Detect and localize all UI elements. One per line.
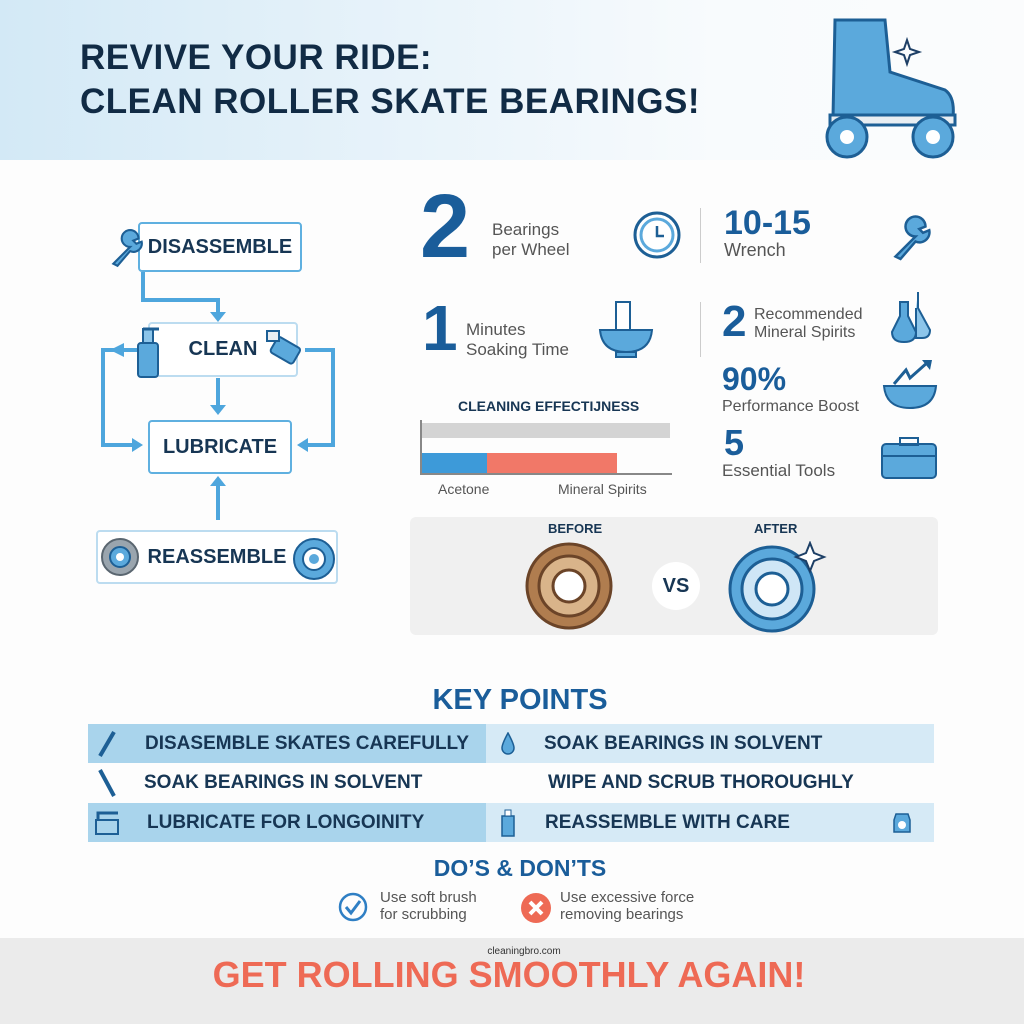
title: CLEAN ROLLER SKATE BEARINGS! <box>80 82 700 121</box>
vs badge <box>652 562 700 610</box>
dont item: removing bearings <box>560 906 683 923</box>
chart: cleaning effectiveness: CLEANING EFFECTIJNESS <box>458 398 639 414</box>
key points table: WIPE AND SCRUB THOROUGHLY <box>548 772 854 793</box>
icon: spray bottle <box>137 328 159 378</box>
step: disassemble <box>138 222 302 272</box>
header band <box>0 0 1024 160</box>
icon: wrench <box>894 215 931 260</box>
icon: flasks <box>891 292 931 343</box>
icon: bearing blue <box>293 538 335 580</box>
icon: bearing grey <box>101 538 139 576</box>
key points table: DISASEMBLE SKATES CAREFULLY <box>145 733 469 754</box>
key points table: SOAK BEARINGS IN SOLVENT <box>544 733 822 754</box>
panel: before vs after <box>410 517 938 635</box>
chart: cleaning effectiveness: Acetone <box>438 481 489 497</box>
footer band: cleaningbro.com <box>487 946 561 957</box>
key points table <box>88 724 934 842</box>
stat: 2 recommended <box>722 297 862 346</box>
stat: 2 bearings: per Wheel <box>492 240 569 259</box>
stat: 90%: Performance Boost <box>722 398 859 415</box>
stat: 2 recommended: Mineral Spirits <box>754 324 855 341</box>
step: reassemble <box>96 530 338 584</box>
icon: clock <box>634 212 680 258</box>
heading: dos and donts: DO’S & DON’TS <box>434 855 606 881</box>
stat: 10-15 wrench <box>724 204 811 260</box>
divider <box>700 208 701 263</box>
icon: roller skate <box>826 18 956 158</box>
stat: 2 bearings <box>420 177 569 277</box>
key points table: REASSEMBLE WITH CARE <box>545 812 790 833</box>
chart: cleaning effectiveness <box>420 398 672 497</box>
panel: before vs after: AFTER <box>754 521 797 536</box>
do item: for scrubbing <box>380 906 467 923</box>
flowchart <box>96 222 338 584</box>
panel: before vs after: BEFORE <box>548 521 602 536</box>
title: REVIVE YOUR RIDE: <box>80 38 432 77</box>
icon: wrench <box>112 229 143 268</box>
do item <box>338 889 477 923</box>
icon: bowl chart <box>882 360 938 409</box>
vs badge: VS <box>663 574 689 596</box>
chart: cleaning effectiveness: Mineral Spirits <box>558 481 647 497</box>
stat: 10-15 wrench: 10-15 <box>724 204 811 242</box>
dont item: Use excessive force <box>560 889 694 906</box>
step: reassemble: REASSEMBLE <box>148 546 286 568</box>
icon: clean bearing <box>728 541 826 632</box>
footer band <box>0 938 1024 1024</box>
footer slogan: GET ROLLING SMOOTHLY AGAIN! <box>213 954 805 995</box>
icon: brush <box>266 330 301 365</box>
flow: arrows <box>101 272 335 520</box>
key points table: SOAK BEARINGS IN SOLVENT <box>144 772 422 793</box>
step: clean: CLEAN <box>189 338 257 360</box>
title <box>80 38 700 121</box>
do item: Use soft brush <box>380 889 477 906</box>
icon: toolbox <box>881 437 937 479</box>
step: clean <box>148 322 298 377</box>
icon: dirty bearing <box>526 542 612 630</box>
stat: 1 minutes: Minutes <box>466 320 526 339</box>
stat: 2 bearings: Bearings <box>492 220 559 239</box>
step: disassemble: DISASSEMBLE <box>148 236 292 258</box>
icon: bowl <box>598 301 654 358</box>
stat: 1 minutes <box>422 292 569 364</box>
stat: 10-15 wrench: Wrench <box>724 240 786 260</box>
stat: 5 tools: 5 <box>724 422 744 463</box>
stat: 1 minutes: Soaking Time <box>466 340 569 359</box>
dont item <box>521 889 694 923</box>
step: lubricate: LUBRICATE <box>163 436 277 458</box>
stat: 5 tools: Essential Tools <box>722 461 835 480</box>
stat: 1 minutes: 1 <box>422 292 458 364</box>
stat: 2 bearings: 2 <box>420 177 470 277</box>
key points table: LUBRICATE FOR LONGOINITY <box>147 812 424 833</box>
stat: 5 tools <box>722 422 835 480</box>
step: lubricate <box>148 420 292 474</box>
heading: key points: KEY POINTS <box>432 684 608 716</box>
stat: 2 recommended: 2 <box>722 297 746 346</box>
stat: 90%: 90% <box>722 361 786 397</box>
stat: 90% <box>722 361 859 415</box>
stat: 2 recommended: Recommended <box>754 306 862 323</box>
